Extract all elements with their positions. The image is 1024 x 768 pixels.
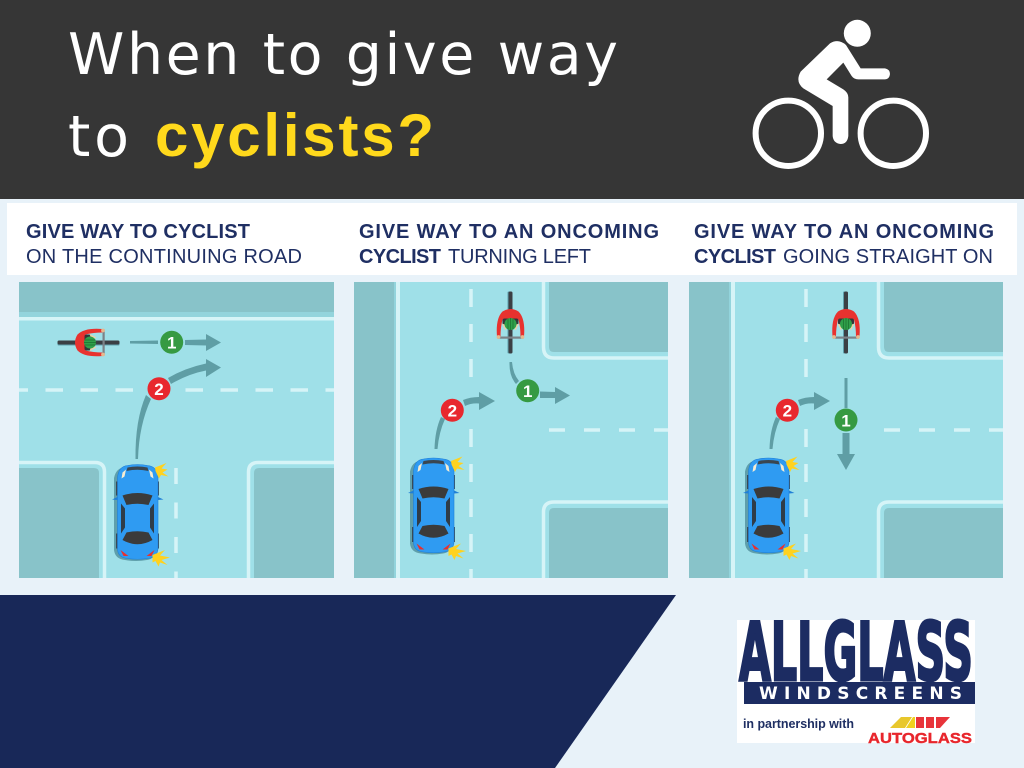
heading: oncoming straight on: CYCLIST [694,246,776,268]
heading: continuing road [26,221,302,268]
cyclist [832,292,860,354]
panel: oncoming turning left [354,282,668,578]
header band [0,0,1024,199]
logo: Autoglass [868,717,972,747]
arrow 1 [130,334,221,351]
icon: cyclist [756,20,926,166]
title: to [68,104,129,170]
arrow 2 [434,392,495,449]
navy footer shape [0,595,676,768]
panel headings [7,203,1017,275]
step 1 badge: 1 [523,382,532,401]
step 1 badge: 1 [841,411,851,430]
car [112,463,170,566]
arrow 2 [770,392,830,449]
title: cyclists? [155,102,434,169]
step 2 badge [776,399,799,422]
car [743,456,801,560]
heading: continuing road: GIVE WAY TO CYCLIST [26,221,250,243]
arrow 1 [509,362,570,404]
cyclist [497,292,524,354]
step 2 badge: 2 [783,402,792,420]
partnership text: in partnership with [743,717,854,731]
step 1 badge [160,331,183,354]
step 1 badge: 1 [167,334,176,352]
heading: oncoming straight on [694,221,994,268]
heading: oncoming turning left: TURNING LEFT [448,246,591,268]
panel: continuing road [19,282,334,578]
windscreens bar: WINDSCREENS [759,684,962,704]
arrow 2 [135,359,221,459]
arrow 1 [837,378,855,470]
heading: oncoming turning left: GIVE WAY TO AN ONCOMING [359,221,659,243]
heading: oncoming straight on: GIVE WAY TO AN ONCOMING [694,221,994,243]
step 1 badge [516,379,539,402]
cyclist [58,329,120,356]
step 2 badge: 2 [154,380,164,399]
panel: oncoming straight on [689,282,1003,578]
heading: oncoming turning left [359,221,659,268]
heading: continuing road: ON THE CONTINUING ROAD [26,246,302,268]
title: When to give way [68,22,618,88]
step 2 badge: 2 [448,402,457,420]
step 1 badge [834,408,858,432]
heading: oncoming turning left: CYCLIST [359,246,441,268]
step 2 badge [441,399,464,422]
heading: oncoming straight on: GOING STRAIGHT ON [783,246,993,268]
step 2 badge [148,377,170,400]
logo: Allglass Windscreens [737,606,975,747]
car [408,456,466,560]
title [68,22,618,170]
logo: Autoglass: AUTOGLASS [868,731,972,747]
